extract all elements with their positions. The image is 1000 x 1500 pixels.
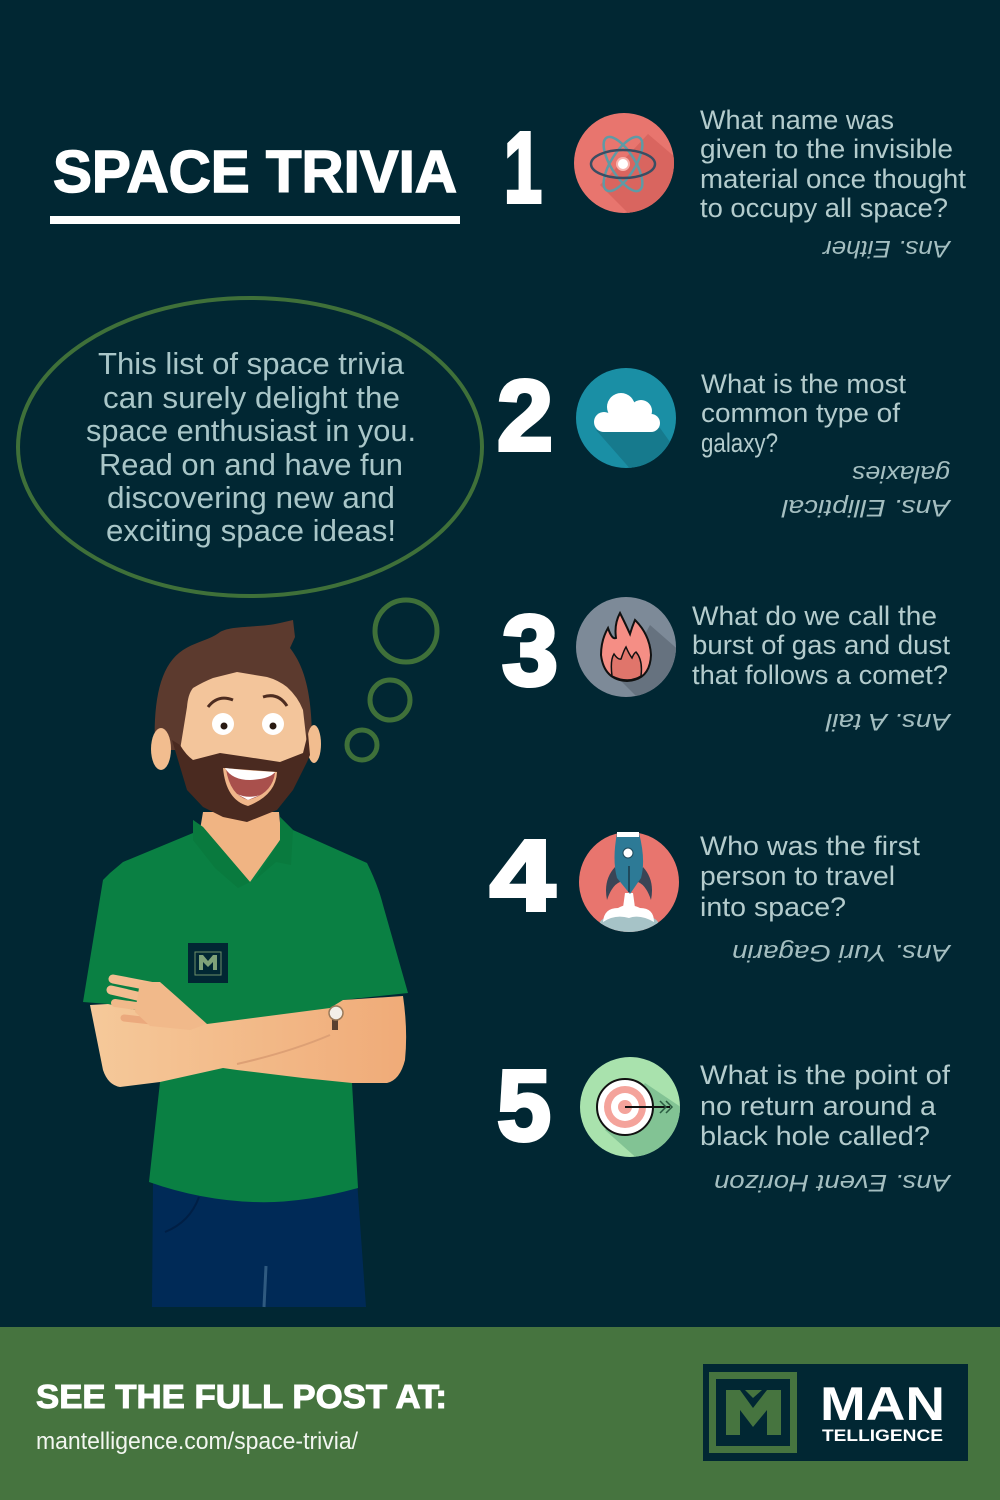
question 3 text: What do we call the	[692, 601, 937, 631]
shirt	[83, 817, 408, 1202]
wrist watch	[329, 1006, 343, 1030]
question 2 text: What is the most	[701, 369, 906, 399]
thought bubble with intro text: This list of space trivia	[98, 346, 405, 381]
footer heading: SEE THE FULL POST AT:	[36, 1378, 447, 1415]
face	[180, 672, 307, 780]
answer 4 upside down: Ans. Yuri Gagarin	[732, 939, 952, 966]
answer 2 upside down: galaxies	[852, 460, 950, 487]
ears	[151, 725, 321, 770]
question 3 text	[692, 601, 951, 690]
footer url: mantelligence.com/space-trivia/	[36, 1428, 358, 1455]
number 4: 4	[490, 820, 555, 932]
icon: rocket	[579, 832, 679, 937]
thought bubble with intro text: can surely delight the	[103, 380, 400, 415]
logo: Mantelligence: TELLIGENCE	[822, 1427, 943, 1445]
number 3: 3	[502, 595, 558, 707]
question 1 text: given to the invisible	[700, 134, 953, 164]
answer 3 upside down: Ans. A tail	[825, 708, 952, 735]
question 4 text: person to travel	[700, 861, 895, 891]
collar	[193, 817, 293, 888]
title: Space Trivia: SPACE TRIVIA	[53, 139, 457, 205]
answer 2 upside down: Ans. Elliptical	[781, 494, 952, 521]
question 5 text: What is the point of	[700, 1060, 951, 1090]
question 4 text	[700, 831, 921, 922]
question 5 text	[700, 1060, 951, 1151]
logo: Mantelligence	[703, 1364, 968, 1461]
neck	[200, 812, 282, 885]
trousers	[152, 1180, 366, 1307]
question 1 text: What name was	[700, 105, 894, 135]
thought bubble with intro text	[18, 298, 482, 760]
question 1 text: material once thought	[700, 164, 967, 194]
thought bubble with intro text: exciting space ideas!	[106, 513, 396, 548]
icon: atom	[574, 113, 674, 213]
shirt badge	[188, 943, 228, 983]
question 3 text: burst of gas and dust	[692, 630, 951, 660]
question 5 text: no return around a	[700, 1091, 937, 1121]
answer 5 upside down: Ans. Event Horizon	[714, 1169, 952, 1196]
question 2 text: common type of	[701, 398, 901, 428]
mouth	[223, 768, 277, 806]
logo: Mantelligence: MAN	[820, 1377, 945, 1430]
number 5: 5	[497, 1050, 551, 1162]
icon: flame	[576, 597, 676, 697]
question 4 text: Who was the first	[700, 831, 921, 861]
question 1 text: to occupy all space?	[700, 193, 948, 223]
hair	[155, 620, 312, 750]
thought bubble with intro text: discovering new and	[107, 480, 395, 515]
beard	[172, 733, 310, 822]
question 2 text	[701, 369, 906, 458]
number 2: 2	[497, 360, 553, 472]
thought bubble with intro text: Read on and have fun	[99, 447, 403, 482]
icon: cloud	[576, 368, 676, 468]
man character with crossed arms	[83, 620, 408, 1307]
number 1: 1	[504, 112, 542, 224]
question 4 text: into space?	[700, 892, 846, 922]
question 5 text: black hole called?	[700, 1121, 930, 1151]
eyes	[208, 696, 287, 735]
answer 2 upside down	[781, 460, 952, 521]
crossed arms	[90, 979, 406, 1087]
footer band	[0, 1327, 1000, 1500]
question 3 text: that follows a comet?	[692, 660, 948, 690]
question 2 text: galaxy?	[701, 428, 778, 458]
answer 1 upside down: Ans. Either	[822, 235, 952, 262]
thought bubble with intro text: space enthusiast in you.	[86, 413, 416, 448]
icon: target with arrow	[580, 1057, 680, 1157]
question 1 text	[700, 105, 967, 223]
